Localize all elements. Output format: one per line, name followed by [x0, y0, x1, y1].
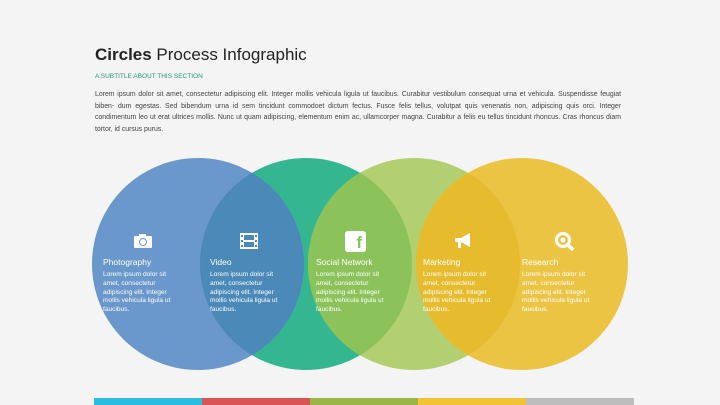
text: Research: [522, 257, 558, 267]
text: Lorem ipsum dolor sit amet, consectetur adipiscing elit. Integer mollis vehicula ligula ut faucibus.: [210, 271, 277, 313]
icon: megaphone: [455, 233, 470, 248]
subtitle: A SUBTITLE ABOUT THIS SECTION: [95, 73, 203, 80]
item: Social Network: [316, 257, 384, 313]
item: Marketing: [423, 257, 490, 313]
intro paragraph: Lorem ipsum dolor sit amet, consectetur adipiscing elit. Integer mollis vehicula ligula ut faucibus. Curabitur vestibulum consequat urna et vehicula. Suspendisse feugiat biben- dum egestas. Sed bibendum urna id sem tincidunt commodoet dictum fectus. Fusce felis tellus, volutpat quis venenatis non, adipiscing quis orci. Integer condimentum leo ut erat ultrices mollis. Nunc ut quam adipiscing, elementum enim ac, ullamcorper magna. Curabitur a felis eu tellus tincidunt rhoncus. Cras rhoncus diam tortor, id cursus purus.: [95, 91, 621, 133]
text: Marketing: [423, 257, 460, 267]
text: Photography: [103, 257, 151, 267]
icon: camera: [134, 234, 152, 248]
item: Photography: [103, 257, 170, 313]
icon: facebook: f: [356, 233, 362, 252]
text: Lorem ipsum dolor sit amet, consectetur adipiscing elit. Integer mollis vehicula ligula ut faucibus.: [316, 271, 383, 313]
title: Circles Process Infographic: [95, 45, 307, 64]
icon: magnifier: [555, 232, 574, 251]
icon: film: [240, 233, 258, 249]
text: Lorem ipsum dolor sit amet, consectetur adipiscing elit. Integer mollis vehicula ligula ut faucibus.: [103, 271, 170, 313]
item: Research: [522, 257, 590, 313]
item: Video: [210, 257, 278, 313]
circles diagram: [92, 158, 628, 370]
icon: facebook: [345, 231, 366, 252]
text: Lorem ipsum dolor sit amet, consectetur adipiscing elit. Integer mollis vehicula ligula ut faucibus.: [423, 271, 490, 313]
text: Lorem ipsum dolor sit amet, consectetur adipiscing elit. Integer mollis vehicula ligula ut faucibus.: [522, 271, 589, 313]
text: Video: [210, 257, 232, 267]
text: Social Network: [316, 257, 373, 267]
bottom color bar: [94, 398, 634, 405]
